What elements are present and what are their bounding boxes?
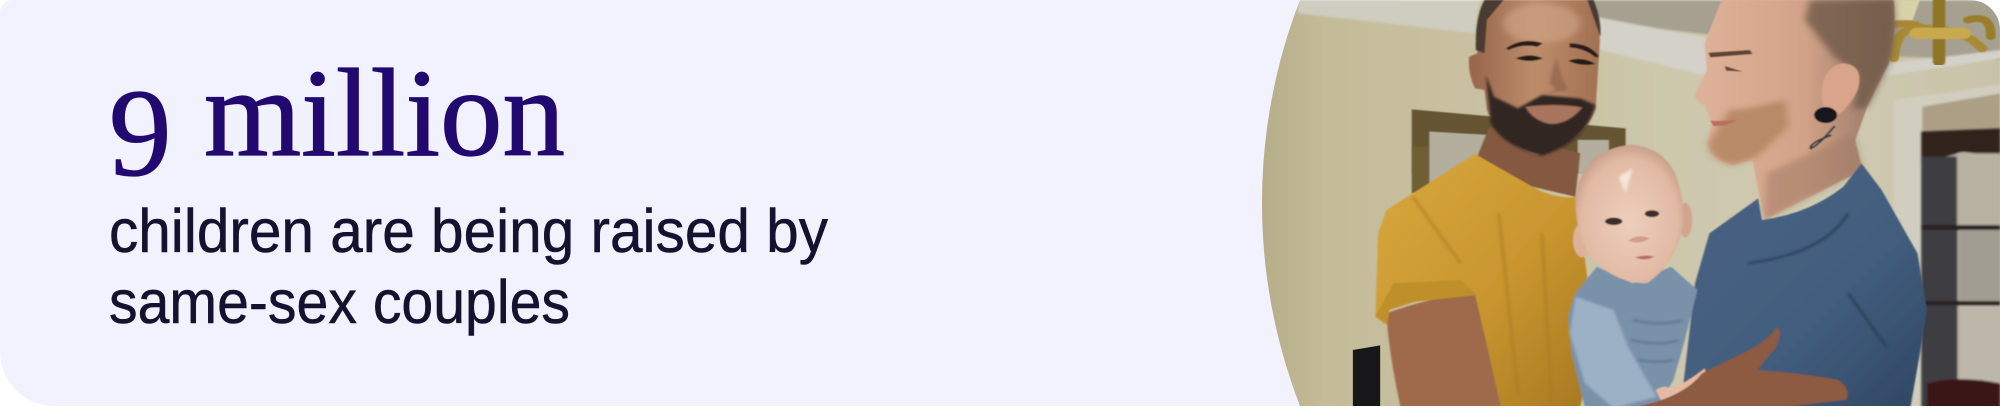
- stubble: [1708, 100, 1788, 165]
- photo: two fathers holding a baby: [1250, 0, 2000, 408]
- blue t-shirt: [1681, 163, 1927, 408]
- baby: [1568, 145, 1707, 408]
- baby head: [1575, 145, 1683, 283]
- door with window panes: [1921, 128, 2000, 408]
- buzzed hair shading: [1805, 0, 1895, 110]
- framed mirror: [1412, 109, 1626, 193]
- baby sleeve highlight: [1570, 297, 1657, 408]
- left man neck: [1477, 127, 1580, 197]
- baby hands and arm: [1656, 368, 1707, 402]
- beard: [1486, 75, 1595, 156]
- text block: description: children are being raised by: [109, 197, 828, 265]
- eyebrows: [1506, 41, 1599, 57]
- buzzed hair: [1476, 0, 1600, 53]
- heading: 9 million: million: [204, 45, 565, 183]
- neck shadow: [1764, 133, 1862, 220]
- baby ears: [1572, 224, 1589, 258]
- baby eyes: [1605, 218, 1622, 225]
- text block: description: same-sex couples: [109, 268, 570, 336]
- man in blue shirt: [1681, 0, 1927, 408]
- eyebrow and eye: [1708, 50, 1752, 72]
- ear gauge: [1814, 107, 1837, 123]
- left man arm: [1386, 293, 1504, 408]
- baby forehead highlight: [1618, 168, 1633, 193]
- left man head: [1469, 0, 1600, 155]
- heading: 9 million: 9: [109, 65, 172, 203]
- forehead highlight: [1504, 3, 1580, 43]
- panel: lavender background: [0, 0, 1400, 406]
- speaker: [1353, 345, 1380, 408]
- room background: [1250, 0, 2000, 408]
- smile: [1710, 119, 1737, 126]
- chandelier: [1894, 0, 1991, 62]
- text block: description: [109, 197, 828, 336]
- eyes: [1516, 55, 1595, 65]
- mouth: [1525, 105, 1583, 124]
- sleeve cuff: [1375, 280, 1477, 323]
- yellow t-shirt: [1375, 154, 1595, 408]
- man in yellow shirt: [1375, 0, 1600, 408]
- nose shadow: [1549, 60, 1568, 92]
- ear: [1822, 63, 1859, 120]
- shirt folds: [1412, 196, 1548, 353]
- baby top folds: [1630, 320, 1683, 362]
- baby top: [1568, 267, 1697, 408]
- people: [1375, 0, 1927, 408]
- baby nose and mouth: [1628, 236, 1650, 242]
- hand of left man around right man: [1628, 327, 1848, 408]
- neck tattoo: [1811, 126, 1835, 148]
- right man head and neck: [1695, 0, 1895, 220]
- sleeve seam: [1748, 213, 1886, 347]
